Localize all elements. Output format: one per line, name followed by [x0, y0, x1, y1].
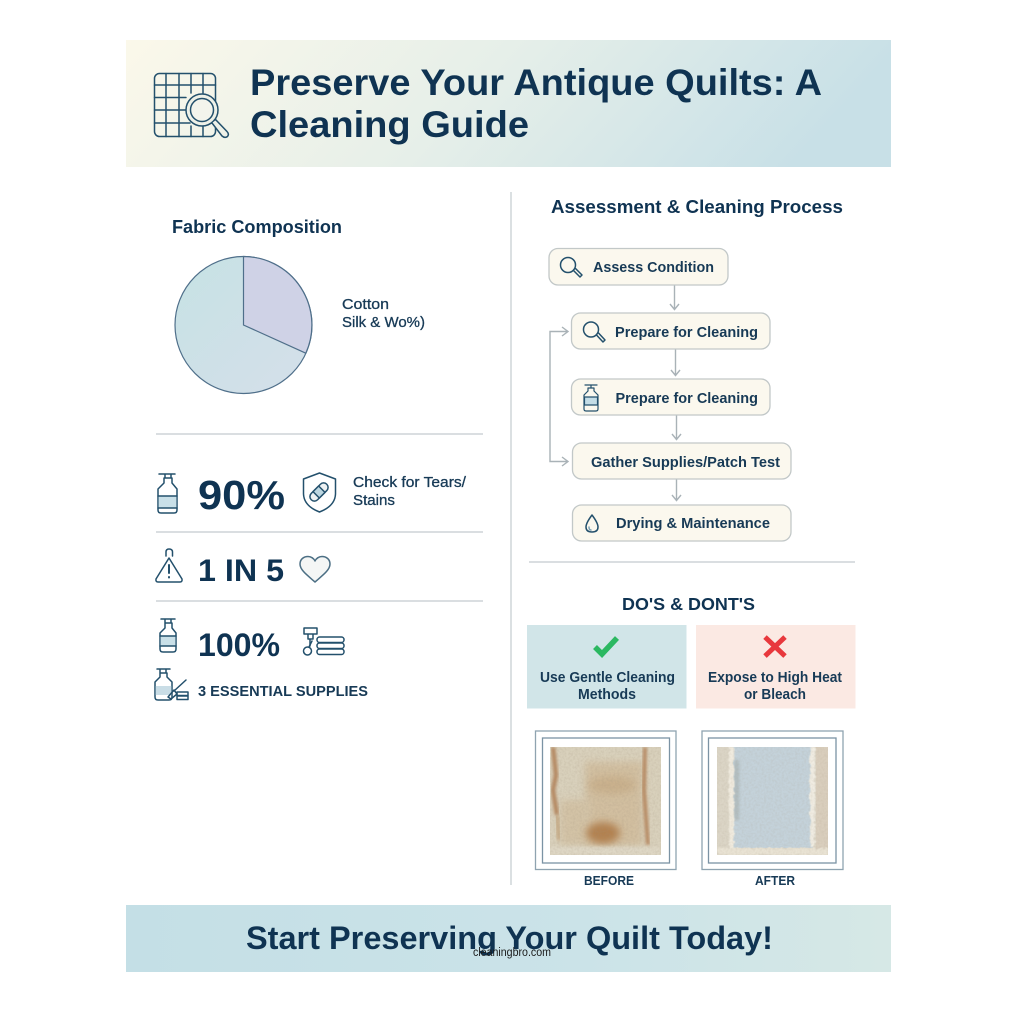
- panel: do: [527, 625, 686, 708]
- arrow: down 3: [672, 415, 681, 440]
- pie legend: Silk & Wo%): [342, 315, 425, 331]
- stat: 90%: [158, 472, 467, 518]
- icon: heart: [300, 556, 330, 582]
- heading: do's and don'ts: DO'S & DONT'S: [622, 594, 755, 614]
- before image: [536, 731, 676, 870]
- stat description: [353, 475, 467, 509]
- icon: quilt grid with magnifying glass: [154, 74, 228, 137]
- panel: don't: [696, 625, 856, 708]
- heading: assessment and cleaning process: Assessment & Cleaning Process: [551, 197, 843, 217]
- footer banner: [126, 905, 891, 972]
- icon: bottle: [160, 619, 176, 652]
- flowchart: cleaning process: [549, 248, 791, 541]
- label: 3 ESSENTIAL SUPPLIES: [198, 684, 368, 700]
- stat: 100%: [160, 619, 344, 663]
- step: drying and maintenance: Drying & Maintenance: [616, 516, 770, 532]
- panel: fabric composition: [172, 217, 425, 394]
- pie legend: Cotton: [342, 297, 389, 313]
- do text: Use Gentle Cleaning: [540, 670, 675, 686]
- arrow: down 2: [671, 349, 680, 376]
- stat value: 1 IN 5: [198, 552, 284, 588]
- icon: warning triangle: [156, 549, 182, 582]
- step: drying and maintenance: [572, 505, 791, 541]
- stat value: 90%: [198, 472, 285, 518]
- arrow: down 4: [672, 479, 681, 500]
- icon: supplies: [155, 669, 188, 700]
- title: [250, 62, 822, 145]
- pie legend: [342, 297, 425, 331]
- stat value: 100%: [198, 627, 280, 663]
- step: assess condition: [549, 248, 728, 285]
- heading: fabric composition: Fabric Composition: [172, 217, 342, 237]
- title: Preserve Your Antique Quilts: A: [250, 62, 822, 103]
- don't text: or Bleach: [744, 687, 806, 703]
- step: gather supplies: Gather Supplies/Patch Test: [591, 455, 780, 471]
- step: prepare for cleaning 1: Prepare for Cleaning: [615, 325, 758, 341]
- do text: [540, 670, 675, 703]
- icon: brush and folded towels: [304, 628, 344, 655]
- icon: shield with bandage: [304, 473, 336, 512]
- stat description: Stains: [353, 493, 395, 509]
- icon: check mark: [595, 638, 617, 654]
- stat: 3 essential supplies: [155, 669, 368, 700]
- pie chart: [175, 256, 312, 394]
- after image: [702, 731, 843, 870]
- step: gather supplies: [572, 443, 791, 479]
- watermark: cleaningbro.com: [473, 947, 551, 959]
- header banner: [126, 40, 891, 167]
- do text: Methods: [578, 687, 636, 703]
- icon: bottle: [158, 474, 177, 513]
- don't text: Expose to High Heat: [708, 670, 842, 686]
- call to action: Start Preserving Your Quilt Today!: [246, 920, 773, 956]
- icon: cross mark: [765, 637, 785, 656]
- after caption: AFTER: [755, 874, 795, 888]
- before caption: BEFORE: [584, 874, 634, 888]
- stat: 1 in 5: [156, 549, 330, 588]
- arrow: loop connector: [550, 327, 568, 466]
- stat description: Check for Tears/: [353, 475, 467, 491]
- title: Cleaning Guide: [250, 104, 529, 145]
- step: prepare for cleaning 2: Prepare for Cleaning: [616, 391, 758, 407]
- don't text: [708, 670, 842, 703]
- arrow: down 1: [670, 285, 679, 310]
- step: prepare for cleaning 1: [572, 313, 770, 349]
- step: prepare for cleaning 2: [572, 379, 770, 415]
- step: assess condition: Assess Condition: [593, 260, 714, 276]
